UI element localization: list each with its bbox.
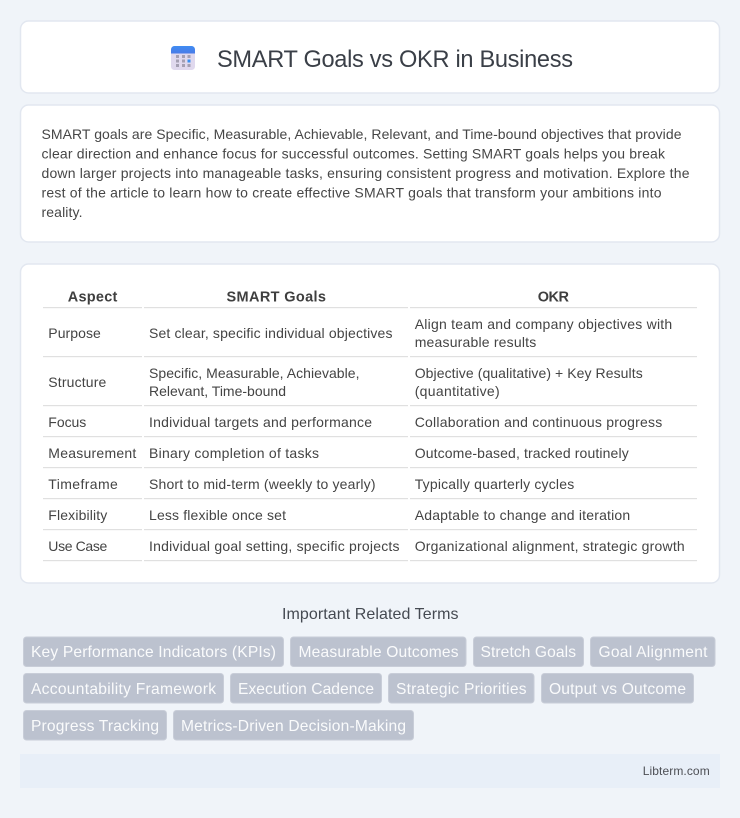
row: measurement: Binary completion of tasks: [149, 445, 319, 461]
table header row: OKR: [538, 290, 570, 306]
footer credit: Libterm.com: [643, 764, 710, 778]
text block: introduction paragraph: down larger projects into manageable tasks, ensuring consistent progress and motivation. Explore the: [42, 165, 690, 181]
row: flexibility: Adaptable to change and iteration: [415, 507, 630, 523]
tag: [388, 674, 534, 703]
row: focus: Focus: [48, 414, 86, 430]
row: measurement: Measurement: [48, 445, 136, 461]
tag: Strategic Priorities: [396, 681, 527, 698]
tag: Execution Cadence: [238, 681, 374, 698]
row: use case: Individual goal setting, specific projects: [149, 538, 400, 554]
row: purpose: Purpose: [48, 325, 101, 341]
row: timeframe: Timeframe: [48, 476, 118, 492]
row: structure: (quantitative): [415, 383, 500, 399]
row: structure: Structure: [48, 374, 107, 390]
row: flexibility: Less flexible once set: [149, 507, 286, 523]
row: purpose: Set clear, specific individual objectives: [149, 325, 392, 341]
row: focus: [48, 414, 662, 430]
tag: [24, 710, 166, 740]
table header row: [68, 290, 570, 306]
tag: Metrics-Driven Decision-Making: [181, 718, 406, 735]
row: structure: [48, 365, 643, 399]
row: purpose: measurable results: [415, 334, 536, 350]
row: purpose: Align team and company objectives with: [415, 316, 672, 332]
row: purpose: [48, 316, 672, 350]
icon: calendar: [171, 46, 195, 70]
row: structure: Objective (qualitative) + Key Results: [415, 365, 643, 381]
tag: [590, 637, 715, 666]
tag: [174, 710, 414, 740]
tag: [230, 674, 382, 703]
row: use case: Organizational alignment, strategic growth: [415, 538, 685, 554]
tag: Stretch Goals: [480, 644, 576, 661]
tag: [474, 637, 584, 666]
row: focus: Collaboration and continuous progress: [415, 414, 662, 430]
title: SMART Goals vs OKR in Business: [217, 47, 573, 73]
tag: Accountability Framework: [31, 681, 216, 698]
row: measurement: Outcome-based, tracked routinely: [415, 445, 629, 461]
panel: comparison table: [20, 264, 720, 583]
text block: introduction paragraph: [42, 126, 690, 220]
tag: Measurable Outcomes: [298, 644, 459, 661]
row: timeframe: Typically quarterly cycles: [415, 476, 574, 492]
tag: [290, 637, 466, 666]
text block: introduction paragraph: clear direction and enhance focus for successful outcomes. Setting SMART goals helps you break: [42, 146, 666, 162]
tag group: related terms: [24, 637, 715, 740]
row: flexibility: [48, 507, 630, 523]
tag: [24, 637, 284, 666]
tag: [542, 674, 694, 703]
footer: [20, 754, 720, 788]
row: measurement: [48, 445, 629, 461]
row: flexibility: Flexibility: [48, 507, 107, 523]
text block: introduction paragraph: SMART goals are Specific, Measurable, Achievable, Relevant, and Time-bound objectives that provide: [42, 126, 682, 142]
table header row: Aspect: [68, 290, 118, 306]
tag: Progress Tracking: [31, 718, 159, 735]
tag: [24, 674, 224, 703]
row: focus: Individual targets and performance: [149, 414, 372, 430]
row: timeframe: Short to mid-term (weekly to yearly): [149, 476, 376, 492]
row: timeframe: [48, 476, 574, 492]
heading: important related terms: Important Related Terms: [282, 606, 458, 623]
text block: introduction paragraph: rest of the article to learn how to create effective SMART goals that transform your ambitions into: [42, 184, 662, 200]
row: structure: Specific, Measurable, Achievable,: [149, 365, 360, 381]
panel: header: [20, 21, 720, 93]
row: use case: Use Case: [48, 538, 108, 554]
tag: Goal Alignment: [598, 644, 708, 661]
table header row: SMART Goals: [226, 290, 326, 306]
tag: Output vs Outcome: [549, 681, 686, 698]
tag: Key Performance Indicators (KPIs): [31, 644, 276, 661]
row: structure: Relevant, Time-bound: [149, 383, 286, 399]
panel: introduction: [20, 105, 720, 242]
text block: introduction paragraph: reality.: [42, 204, 82, 220]
row: use case: [48, 538, 685, 554]
